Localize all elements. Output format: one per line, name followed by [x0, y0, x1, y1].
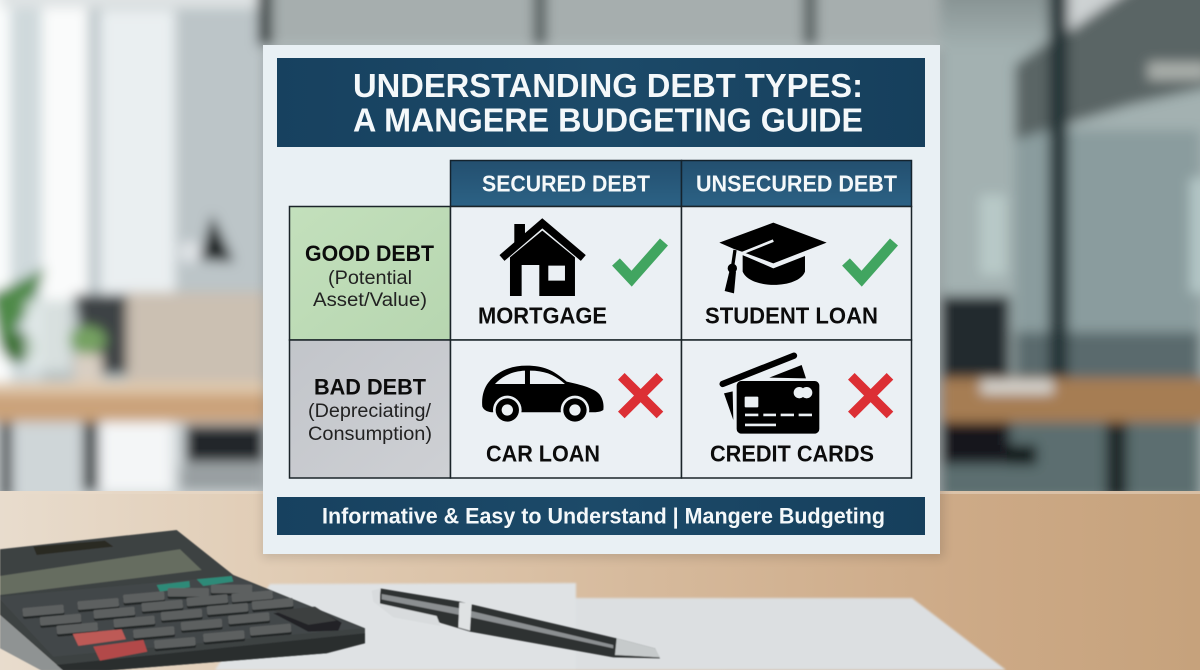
row label: good debt: (Potential	[328, 268, 412, 289]
pen	[372, 588, 660, 658]
row label: bad debt: Consumption)	[308, 424, 432, 445]
row label: bad debt: (Depreciating/	[308, 401, 432, 422]
wooden desk	[0, 491, 1200, 670]
column header: unsecured debt	[682, 160, 912, 206]
footer banner: Informative & Easy to Understand | Mangere Budgeting	[322, 504, 885, 528]
cell: credit cards	[682, 340, 912, 478]
icon: car	[482, 366, 604, 424]
blurred office background	[0, 0, 1200, 502]
icon: red cross	[851, 376, 890, 415]
title banner: UNDERSTANDING DEBT TYPES:	[353, 67, 863, 104]
icon: green check	[616, 242, 664, 279]
calculator	[0, 530, 365, 670]
column header: unsecured debt: UNSECURED DEBT	[696, 170, 897, 196]
row label: good debt: Asset/Value)	[313, 290, 427, 311]
icon: red cross	[621, 376, 660, 415]
icon: graduation cap	[719, 223, 827, 293]
cell: mortgage	[450, 206, 682, 340]
panel: debt types poster	[263, 45, 940, 554]
row label: bad debt	[290, 340, 450, 478]
cell: mortgage: MORTGAGE	[478, 302, 607, 328]
cell: student loan: STUDENT LOAN	[705, 302, 878, 328]
title banner: A MANGERE BUDGETING GUIDE	[353, 102, 863, 138]
footer banner	[277, 497, 925, 535]
icon: green check	[846, 242, 894, 279]
cell: credit cards: CREDIT CARDS	[710, 440, 874, 466]
comparison table	[290, 160, 912, 478]
row label: good debt: GOOD DEBT	[305, 241, 435, 266]
cell: car loan: CAR LOAN	[486, 440, 600, 466]
row label: good debt	[290, 206, 450, 340]
title banner	[277, 58, 925, 147]
laptop	[74, 294, 132, 374]
sheets of paper	[215, 583, 1006, 670]
cell: student loan	[682, 206, 912, 340]
row label: bad debt: BAD DEBT	[314, 374, 427, 400]
cell: car loan	[450, 340, 682, 478]
icon: credit cards	[723, 356, 819, 434]
column header: secured debt	[450, 160, 682, 206]
right office	[940, 0, 1200, 500]
board shadow	[262, 50, 944, 558]
icon: house	[502, 223, 583, 296]
lamp	[200, 214, 234, 262]
left desk and lower area	[0, 388, 270, 422]
column header: secured debt: SECURED DEBT	[482, 170, 650, 196]
plants	[0, 268, 46, 350]
